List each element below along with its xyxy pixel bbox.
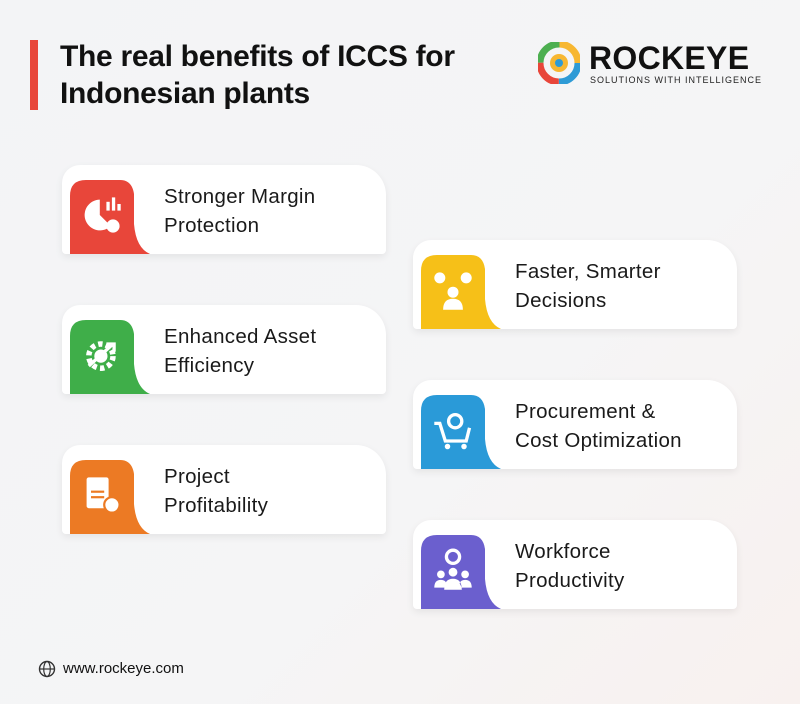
title: The real benefits of ICCS for <box>60 40 455 73</box>
card: Workforce Productivity: Workforce <box>515 540 611 563</box>
footer: website: www.rockeye.com <box>63 660 184 677</box>
title: Indonesian plants <box>60 77 310 110</box>
icon: decision person <box>434 272 472 310</box>
card: Enhanced Asset Efficiency <box>62 305 386 394</box>
icon: team gear <box>434 548 472 590</box>
card: Workforce Productivity: Productivity <box>515 569 625 592</box>
card: Workforce Productivity <box>413 520 737 609</box>
card: Enhanced Asset Efficiency: Efficiency <box>164 354 254 377</box>
card: Procurement & Cost Optimization: Cost Optimization <box>515 429 682 452</box>
icon: cart gear <box>434 413 472 450</box>
title <box>60 40 455 110</box>
card: Procurement & Cost Optimization <box>413 380 737 469</box>
logo text: ROCKEYE <box>589 40 749 76</box>
accent bar <box>30 40 38 110</box>
card: Faster, Smarter Decisions: Faster, Smarter <box>515 260 661 283</box>
card: Project Profitability: Project <box>164 465 230 488</box>
icon: logo swirl <box>538 42 580 84</box>
card: Stronger Margin Protection: Stronger Margin <box>164 185 315 208</box>
card: Stronger Margin Protection <box>62 165 386 254</box>
card: Stronger Margin Protection: Protection <box>164 214 259 237</box>
card: Faster, Smarter Decisions <box>413 240 737 329</box>
card: Enhanced Asset Efficiency: Enhanced Asset <box>164 325 316 348</box>
logo: SOLUTIONS WITH INTELLIGENCE <box>590 75 762 85</box>
icon: pie chart <box>84 197 121 233</box>
icon: globe <box>38 660 56 678</box>
card: Project Profitability <box>62 445 386 534</box>
card: Faster, Smarter Decisions: Decisions <box>515 289 607 312</box>
card: Project Profitability: Profitability <box>164 494 268 517</box>
icon: gear arrow <box>86 341 116 371</box>
card: Procurement & Cost Optimization: Procurement & <box>515 400 656 423</box>
icon: document gear <box>86 477 118 512</box>
logo <box>538 40 762 85</box>
